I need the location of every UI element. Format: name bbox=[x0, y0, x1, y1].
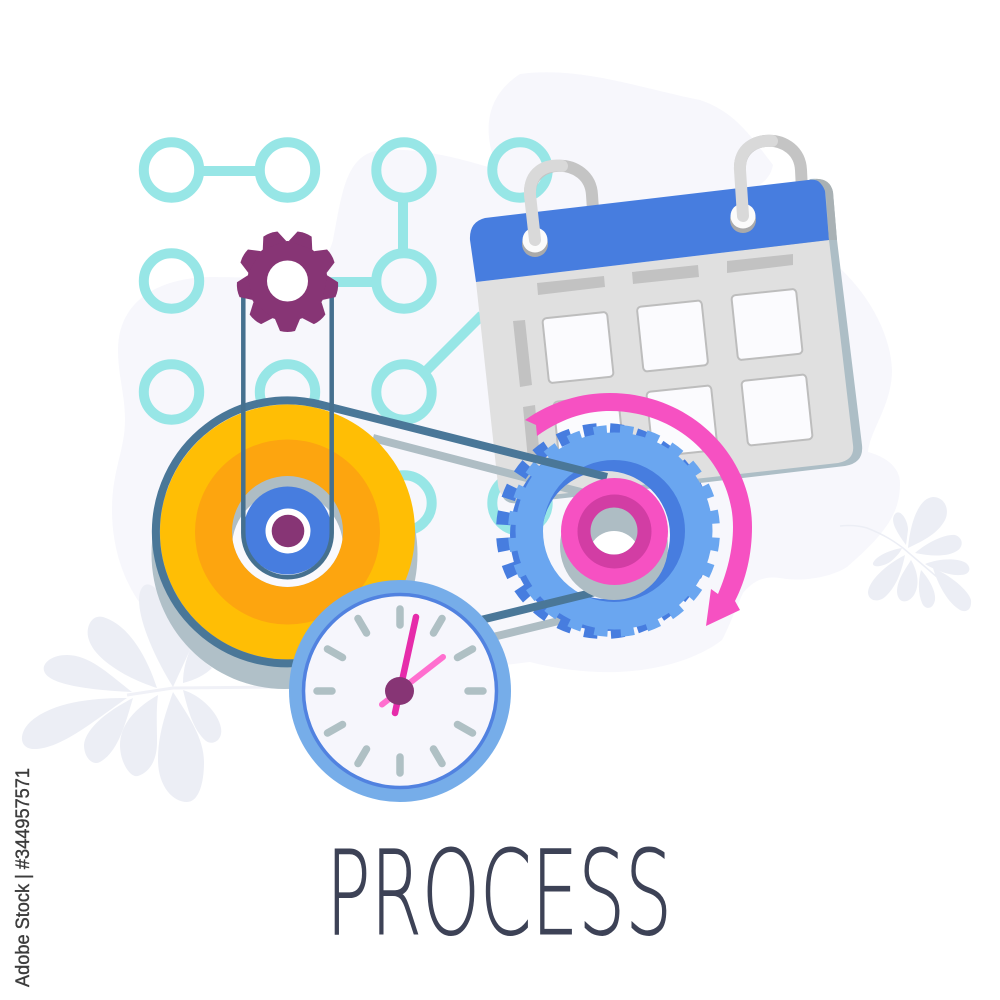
node network bbox=[144, 142, 548, 531]
clock hands bbox=[382, 617, 443, 713]
title: PROCESS bbox=[326, 825, 672, 962]
pink hub bbox=[560, 478, 668, 600]
calendar ring holes bbox=[522, 204, 756, 257]
calendar shadow bbox=[502, 179, 862, 503]
calendar headings bbox=[513, 254, 793, 460]
calendar cells bbox=[542, 289, 813, 467]
background blob bbox=[112, 72, 900, 690]
leaf: left bbox=[22, 584, 287, 802]
clock ticks bbox=[317, 609, 483, 773]
clock bbox=[289, 580, 511, 802]
small gear bbox=[235, 229, 340, 332]
blue gear bbox=[503, 430, 714, 632]
large pulley bbox=[152, 404, 418, 689]
calendar header bbox=[470, 180, 829, 282]
belt shadow bbox=[373, 438, 620, 637]
calendar header corner shade bbox=[815, 179, 837, 240]
leaf: right bbox=[840, 497, 971, 611]
calendar front rings bbox=[530, 141, 772, 240]
drive belt bbox=[156, 400, 620, 663]
pulley hub bbox=[244, 486, 332, 574]
calendar body bbox=[476, 240, 853, 499]
vertical belt bbox=[243, 296, 332, 577]
pink arrow bbox=[525, 393, 752, 626]
calendar back rings bbox=[530, 141, 802, 210]
watermark id: Adobe Stock | #344957571 bbox=[13, 768, 34, 987]
calendar bbox=[470, 141, 862, 503]
